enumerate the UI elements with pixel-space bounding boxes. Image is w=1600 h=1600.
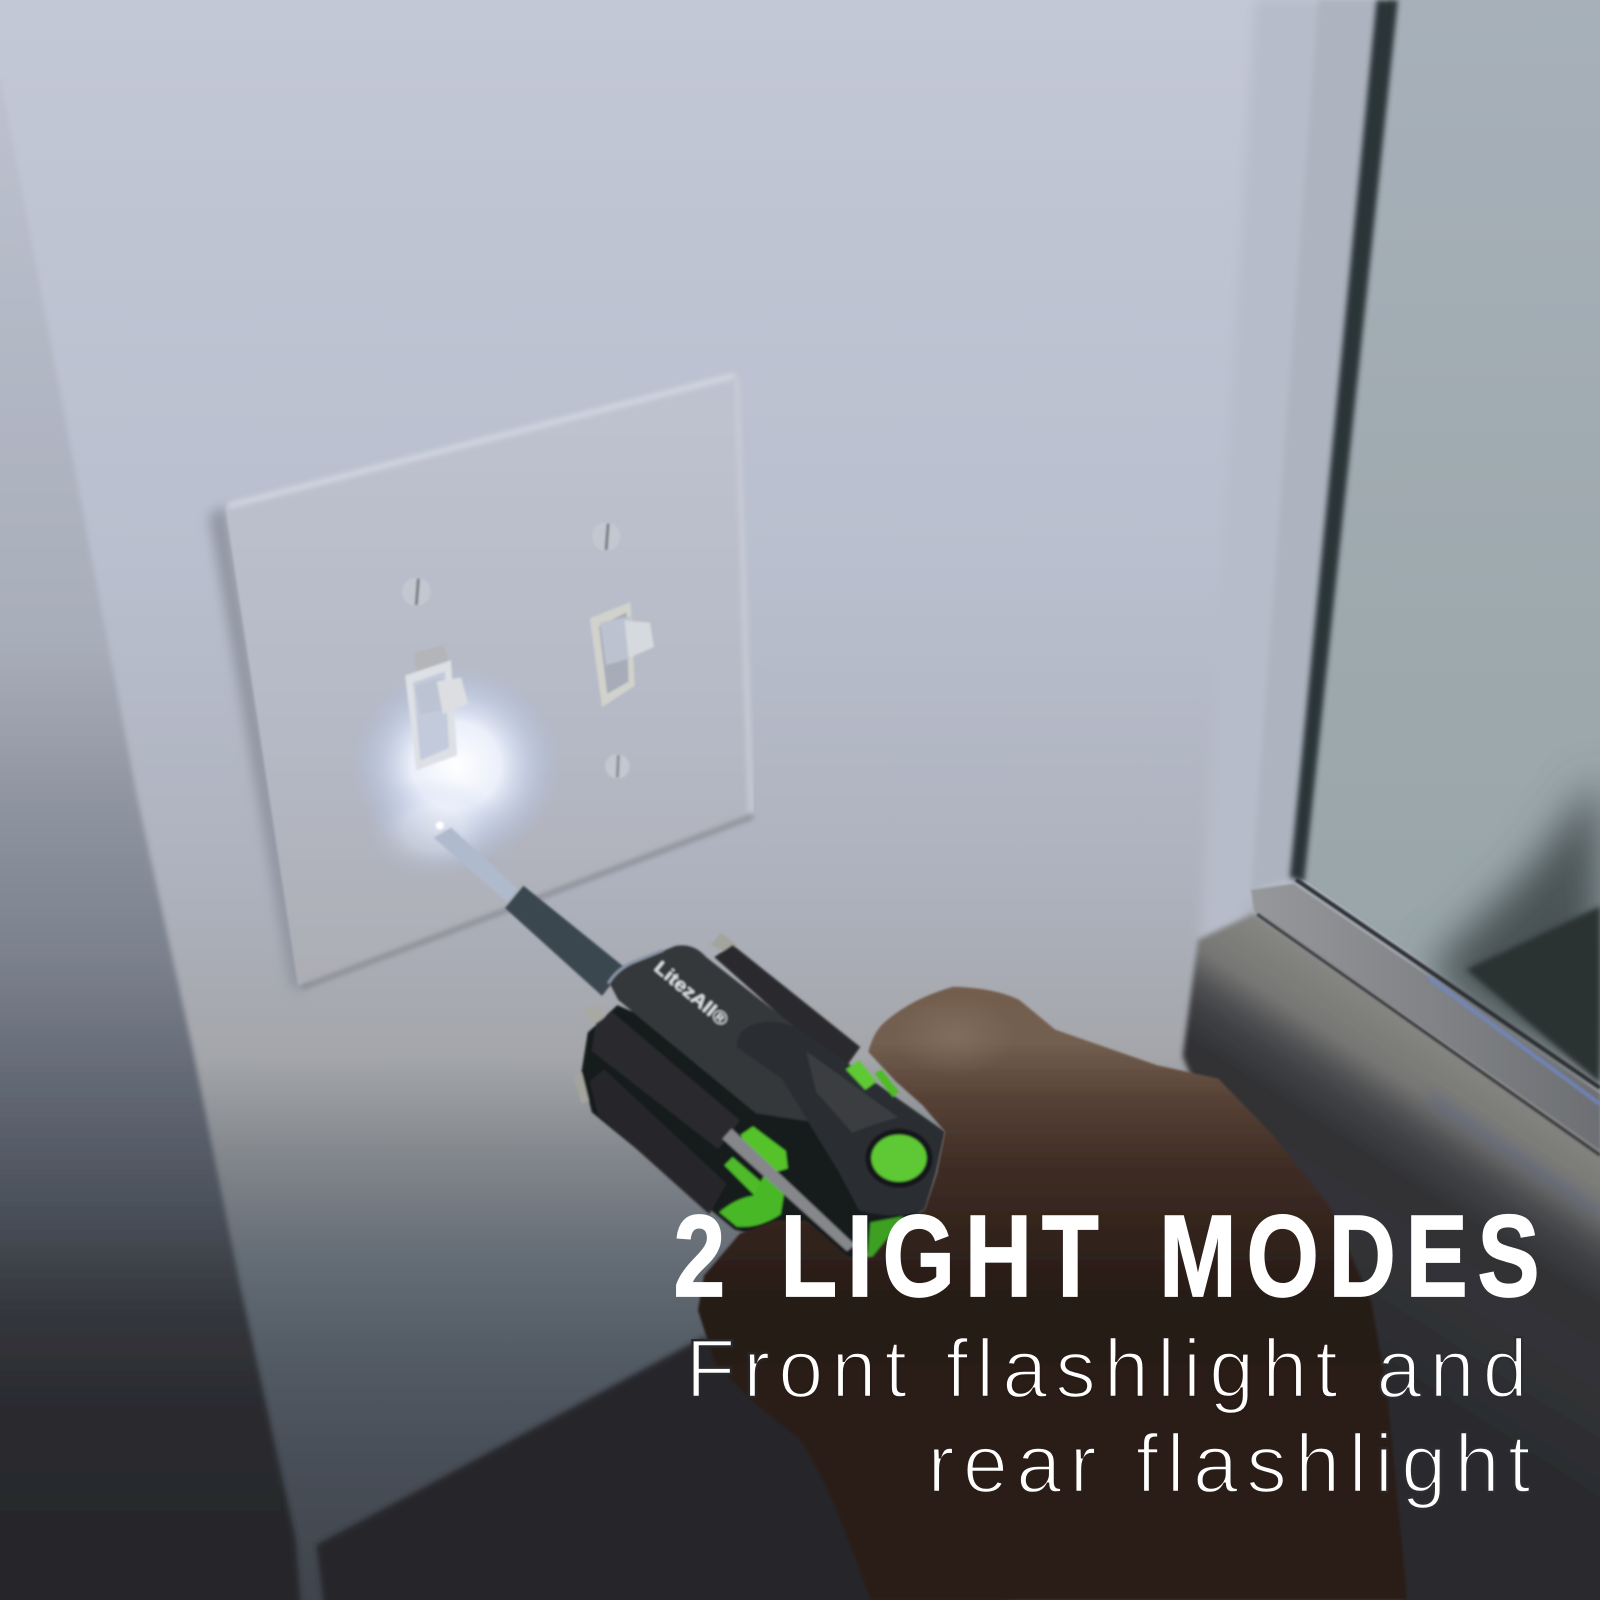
screw bottom right: [605, 754, 630, 779]
left toggle: [405, 645, 468, 770]
plate bottom shadow: [302, 816, 753, 988]
silver bit: [722, 1129, 855, 1251]
floor shadow block: [316, 1337, 1020, 1600]
green button: [865, 1129, 933, 1188]
rail lower dark line: [1257, 914, 1600, 1155]
subheading line 2: rear flashlight: [928, 1418, 1531, 1510]
headline: 2: [673, 1192, 771, 1321]
body highlight: [608, 950, 663, 984]
window trim: [1194, 0, 1403, 1051]
flashlight head shine: [806, 1051, 898, 1133]
tool tip light: [436, 821, 444, 830]
light glow: [350, 663, 562, 867]
headline: MODES: [1159, 1192, 1549, 1321]
central body: [609, 945, 816, 1122]
screw top left: [402, 578, 431, 606]
green clips lower: [719, 1127, 903, 1261]
plate shadow: [209, 505, 306, 990]
mirror dark corner: [1466, 906, 1600, 1084]
window sill rail: [1251, 884, 1600, 1150]
left rods: [590, 1012, 740, 1214]
tool shaft sleeve: [505, 886, 624, 996]
top right rod: [710, 933, 860, 1071]
hand: [698, 987, 1407, 1600]
subheading: [686, 1323, 1531, 1510]
multitool: [573, 933, 945, 1261]
mirror shadow: [1429, 776, 1600, 1082]
plate highlight edge: [228, 376, 735, 506]
hand shape: [698, 987, 1407, 1600]
tool shaft metal: [434, 828, 517, 902]
left upper pin: [584, 1004, 608, 1024]
switch plate: [209, 376, 753, 990]
sill lower blue sheen: [1429, 1097, 1600, 1212]
frame dark line: [1290, 0, 1398, 882]
side wall receding at left: [0, 77, 301, 1600]
right toggle: [590, 602, 654, 707]
subheading line 1: Front flashlight and: [686, 1323, 1528, 1415]
green clips upper: [846, 1060, 899, 1097]
plate body: [226, 376, 752, 986]
left lower pin: [573, 1069, 598, 1104]
sill block: [1183, 913, 1600, 1600]
plate right edge: [737, 378, 751, 812]
light glow near tip: [362, 778, 505, 880]
sill rail blue highlight: [1429, 978, 1600, 1104]
mirror glass: [1301, 0, 1600, 1082]
window frame band: [1251, 0, 1378, 890]
screw top right: [592, 522, 620, 551]
headline: LIGHT: [780, 1192, 1144, 1321]
mirror bottom edge: [1296, 880, 1600, 1088]
flashlight head: [737, 1021, 945, 1215]
thumb highlight: [893, 995, 1015, 1077]
logo text: LitezAll®: [650, 956, 733, 1031]
tool backing: [582, 1005, 923, 1260]
